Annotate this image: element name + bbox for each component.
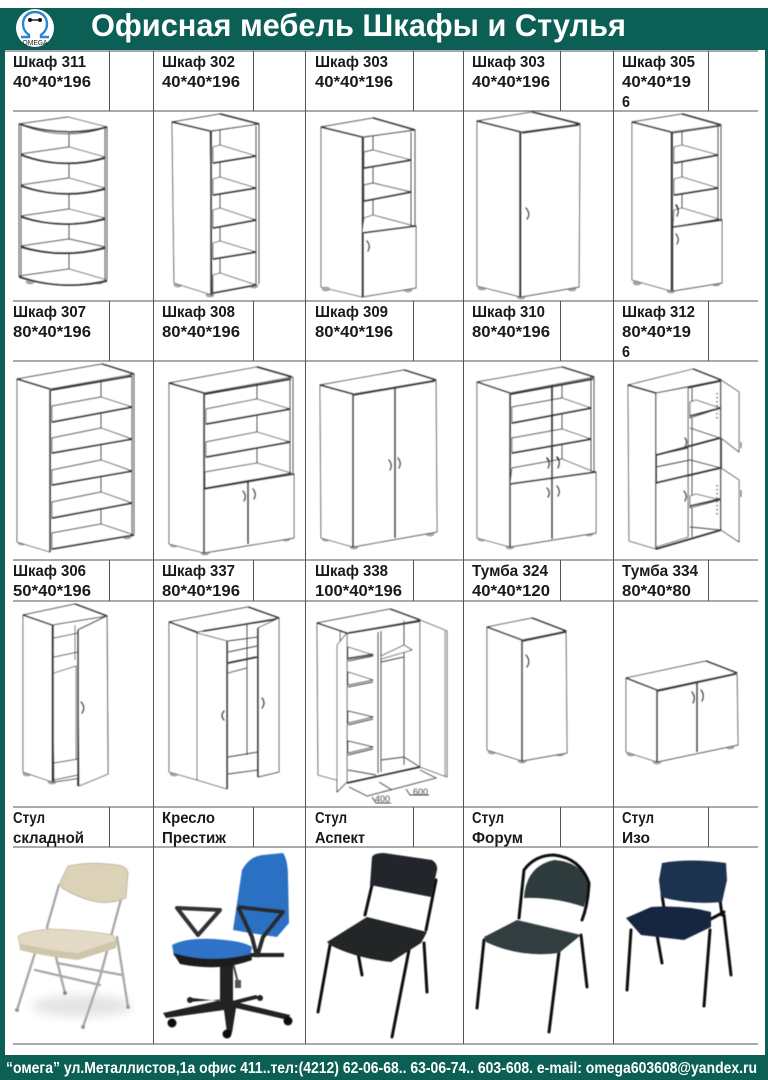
label: Шкаф 311: Шкаф 311 <box>13 54 86 71</box>
label: Стул складной: складной <box>13 830 84 847</box>
label: Шкаф 337: 80*40*196 <box>162 583 240 600</box>
label: Шкаф 306: Шкаф 306 <box>13 563 86 580</box>
label: Шкаф 308 <box>162 304 240 341</box>
label: Шкаф 305 <box>622 54 695 111</box>
label: Шкаф 308: Шкаф 308 <box>162 304 235 321</box>
panel: Стул Форум <box>472 810 589 1032</box>
label: Тумба 334 <box>622 563 698 600</box>
label: Шкаф 338: 100*40*196 <box>315 583 402 600</box>
label: Стул складной: Стул <box>13 810 45 827</box>
label: Шкаф 312: 80*40*19 <box>622 324 691 341</box>
panel: Шкаф 310 <box>472 304 596 549</box>
photo: navy chair <box>626 860 731 1006</box>
label: Стул Форум: Стул <box>472 810 504 827</box>
photo: black chair <box>318 853 437 1037</box>
photo: folding chair <box>15 863 132 1029</box>
logo: Omega <box>16 9 54 47</box>
label: Тумба 334: 80*40*80 <box>622 583 691 600</box>
label: Шкаф 307 <box>13 304 91 341</box>
label: Кресло Престиж: Кресло <box>162 810 215 827</box>
panel: Тумба 324 <box>472 563 567 763</box>
photo: green-grey chair <box>477 855 589 1032</box>
panel: Тумба 334 <box>622 563 738 764</box>
drawing: cabinet 303 with lower door <box>321 118 416 297</box>
drawing: cabinet 312 with open doors <box>628 369 741 549</box>
drawing: cabinet 305 <box>632 114 722 293</box>
drawing: cabinet 302 <box>172 114 259 297</box>
panel: Шкаф 312 <box>622 304 741 549</box>
label: Шкаф 338 <box>315 563 402 600</box>
drawing: cabinet 308 with two doors <box>169 367 294 555</box>
label: Тумба 324 <box>472 563 550 600</box>
label: Шкаф 309: Шкаф 309 <box>315 304 388 321</box>
drawing: wardrobe 338 with dimensions <box>317 609 447 804</box>
label: Шкаф 312: Шкаф 312 <box>622 304 695 321</box>
label: Шкаф 303 <box>472 54 550 91</box>
label: Стул Изо: Изо <box>622 830 650 847</box>
label: Шкаф 338: Шкаф 338 <box>315 563 388 580</box>
panel: Стул Изо <box>622 810 731 1006</box>
drawing: pedestal 334 <box>626 661 738 764</box>
panel: Шкаф 307 <box>13 304 134 552</box>
drawing: pedestal 324 <box>487 618 567 763</box>
panel: Стул складной <box>13 810 132 1029</box>
panel: Шкаф 337 <box>162 563 279 789</box>
panel: Кресло Престиж <box>162 810 292 1038</box>
panel: Шкаф 309 <box>315 304 437 549</box>
drawing: closed cabinet 303 <box>477 112 580 299</box>
label: Шкаф 312: 6 <box>622 344 630 361</box>
label: Шкаф 303: Шкаф 303 <box>315 54 388 71</box>
title: Офисная мебель Шкафы и Стулья <box>91 7 626 43</box>
label: Шкаф 309 <box>315 304 393 341</box>
label: Шкаф 307: 80*40*196 <box>13 324 91 341</box>
panel: Шкаф 303 <box>315 54 416 297</box>
label: Шкаф 310 <box>472 304 550 341</box>
label: Тумба 324: 40*40*120 <box>472 583 550 600</box>
label: Шкаф 308: 80*40*196 <box>162 324 240 341</box>
label: Шкаф 306 <box>13 563 91 600</box>
label: Стул складной <box>13 810 84 847</box>
label: Шкаф 305: 40*40*19 <box>622 74 691 91</box>
dimension: 400: 400 <box>375 794 390 804</box>
photo: blue office chair <box>163 853 292 1038</box>
label: Шкаф 303: 40*40*196 <box>472 74 550 91</box>
label: Шкаф 312 <box>622 304 695 361</box>
label: Стул Изо: Стул <box>622 810 654 827</box>
label: Стул Аспект: Аспект <box>315 830 365 847</box>
label: Шкаф 302 <box>162 54 240 91</box>
label: Шкаф 305: Шкаф 305 <box>622 54 695 71</box>
panel: Шкаф 338 <box>315 563 447 804</box>
panel: Шкаф 303 (door) <box>472 54 580 299</box>
label: Кресло Престиж <box>162 810 227 847</box>
label: Тумба 334: Тумба 334 <box>622 563 698 580</box>
label: Шкаф 307: Шкаф 307 <box>13 304 86 321</box>
panel: Шкаф 306 <box>13 563 108 786</box>
label: Шкаф 311 <box>13 54 91 91</box>
label: Стул Аспект: Стул <box>315 810 347 827</box>
label: Шкаф 302: Шкаф 302 <box>162 54 235 71</box>
label: Шкаф 306: 50*40*196 <box>13 583 91 600</box>
label: Стул Изо <box>622 810 654 847</box>
label: Шкаф 310: Шкаф 310 <box>472 304 545 321</box>
panel: Стул Аспект <box>315 810 437 1037</box>
drawing: closed wardrobe 309 <box>320 370 437 549</box>
panel: Шкаф 305 <box>622 54 722 293</box>
panel: Шкаф 308 <box>162 304 294 555</box>
panel: Шкаф 302 <box>162 54 259 297</box>
label: Шкаф 303: 40*40*196 <box>315 74 393 91</box>
label: Тумба 324: Тумба 324 <box>472 563 548 580</box>
drawing: cabinet 310 with glass doors <box>477 367 596 549</box>
label: Шкаф 302: 40*40*196 <box>162 74 240 91</box>
dimension: 600: 600 <box>413 787 428 797</box>
label: Шкаф 311: 40*40*196 <box>13 74 91 91</box>
label: Шкаф 337 <box>162 563 240 600</box>
panel: Шкаф 311 <box>13 54 107 285</box>
label: Кресло Престиж: Престиж <box>162 830 227 847</box>
label: Шкаф 303 <box>315 54 393 91</box>
label: Шкаф 305: 6 <box>622 94 630 111</box>
label: Стул Аспект <box>315 810 365 847</box>
drawing: corner shelf 311 <box>19 117 107 285</box>
label: Шкаф 303: Шкаф 303 <box>472 54 545 71</box>
label: Шкаф 337: Шкаф 337 <box>162 563 235 580</box>
label: Стул Форум: Форум <box>472 830 523 847</box>
drawing: wardrobe 306 <box>23 604 108 786</box>
label: Шкаф 310: 80*40*196 <box>472 324 550 341</box>
drawing: open shelf 307 <box>17 364 134 552</box>
label: Стул Форум <box>472 810 523 847</box>
label: Шкаф 309: 80*40*196 <box>315 324 393 341</box>
drawing: wardrobe 337 <box>169 607 279 789</box>
logo: Omega: OMEGA <box>22 38 48 47</box>
